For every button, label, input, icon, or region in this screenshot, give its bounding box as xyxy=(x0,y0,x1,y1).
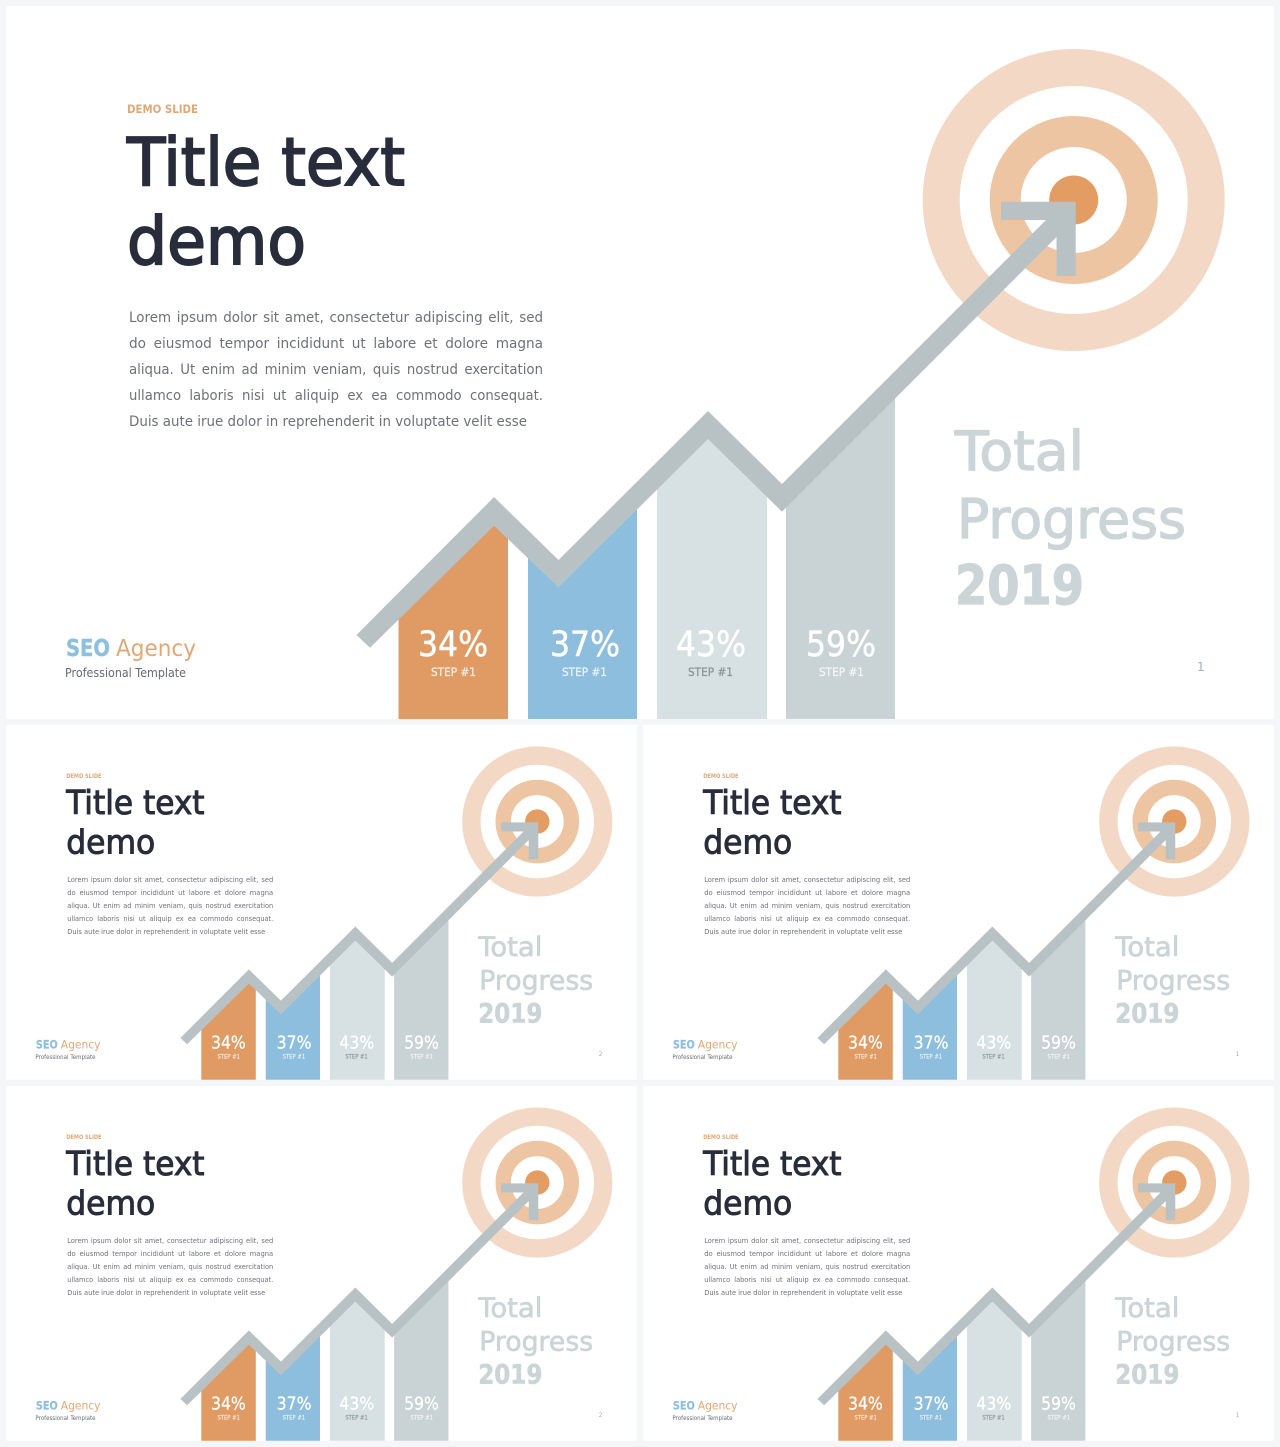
heading: total progress: Progress xyxy=(1116,1327,1230,1358)
bar labels: STEP #1 xyxy=(819,665,864,679)
body text: ullamco laboris nisi ut aliquip ex ea commodo consequat. xyxy=(704,1275,910,1284)
body text: ullamco laboris nisi ut aliquip ex ea commodo consequat. xyxy=(129,388,543,404)
bar labels: STEP #1 xyxy=(283,1415,305,1421)
bar labels: STEP #1 xyxy=(217,1415,240,1421)
bar chart: four steps xyxy=(201,1275,448,1441)
heading: total progress: Progress xyxy=(957,488,1186,551)
bar labels xyxy=(848,1033,1076,1060)
bar labels: STEP #1 xyxy=(982,1054,1005,1060)
logo: SEO xyxy=(36,1398,58,1412)
title xyxy=(126,124,405,280)
bar labels: STEP #1 xyxy=(283,1054,305,1060)
bar labels: 43% xyxy=(976,1033,1011,1053)
body text: aliqua. Ut enim ad minim veniam, quis nostrud exercitation xyxy=(129,362,543,378)
body text: ullamco laboris nisi ut aliquip ex ea commodo consequat. xyxy=(67,1275,273,1284)
body text: ullamco laboris nisi ut aliquip ex ea commodo consequat. xyxy=(67,914,273,923)
icon: target xyxy=(941,68,1206,332)
bar labels: 37% xyxy=(914,1033,949,1053)
heading: total progress: 2019 xyxy=(478,1360,542,1391)
logo: Professional Template xyxy=(672,1054,733,1061)
panel: main slide xyxy=(6,6,1274,719)
bar labels xyxy=(418,625,876,679)
eyebrow label: DEMO SLIDE xyxy=(66,1135,102,1141)
body text: Lorem ipsum dolor sit amet, consectetur adipiscing elit, sed xyxy=(704,875,910,884)
bar labels: STEP #1 xyxy=(854,1054,877,1060)
bar labels xyxy=(848,1394,1076,1421)
body text: Lorem ipsum dolor sit amet, consectetur adipiscing elit, sed xyxy=(704,1236,910,1245)
heading: total progress: Total xyxy=(477,1293,542,1324)
heading: total progress: Total xyxy=(1114,932,1179,963)
logo: Agency xyxy=(698,1037,738,1051)
icon: target xyxy=(1108,1117,1240,1248)
logo: Agency xyxy=(61,1398,101,1412)
body text: Duis aute irue dolor in reprehenderit in voluptate velit esse xyxy=(67,927,266,936)
body text: do eiusmod tempor incididunt ut labore et dolore magna xyxy=(67,888,273,897)
bar labels: 37% xyxy=(277,1033,312,1053)
body text: Lorem ipsum dolor sit amet, consectetur adipiscing elit, sed xyxy=(129,310,543,326)
body text: Lorem ipsum dolor sit amet, consectetur adipiscing elit, sed xyxy=(67,1236,273,1245)
title: Title text xyxy=(702,784,842,822)
logo: SEO xyxy=(36,1037,58,1051)
eyebrow label: DEMO SLIDE xyxy=(127,102,198,116)
bar labels: 34% xyxy=(418,625,488,665)
arrow: rising zigzag to target xyxy=(817,1183,1175,1405)
logo: SEO xyxy=(673,1037,695,1051)
panel: slide thumbnail top left xyxy=(6,725,637,1080)
logo: Agency xyxy=(116,636,196,662)
title: demo xyxy=(66,1184,155,1222)
heading: total progress: Total xyxy=(477,932,542,963)
bar labels: 43% xyxy=(339,1394,374,1414)
body text: Lorem ipsum dolor sit amet, consectetur adipiscing elit, sed xyxy=(67,875,273,884)
bar labels: 34% xyxy=(211,1394,246,1414)
title: demo xyxy=(703,823,792,861)
body text: ullamco laboris nisi ut aliquip ex ea commodo consequat. xyxy=(704,914,910,923)
page number: 2 xyxy=(599,1051,603,1058)
heading: total progress xyxy=(954,420,1186,617)
bar labels xyxy=(211,1394,439,1421)
panel: slide thumbnail top right xyxy=(643,725,1274,1080)
title: demo xyxy=(703,1184,792,1222)
title: Title text xyxy=(126,124,405,201)
heading: total progress: 2019 xyxy=(1115,1360,1179,1391)
title xyxy=(65,784,205,861)
body text: Duis aute irue dolor in reprehenderit in voluptate velit esse xyxy=(67,1288,266,1297)
title: Title text xyxy=(65,784,205,822)
body text: aliqua. Ut enim ad minim veniam, quis nostrud exercitation xyxy=(704,1262,910,1271)
arrow: rising zigzag to target xyxy=(180,822,538,1044)
page number: 1 xyxy=(1236,1051,1240,1058)
arrow: rising zigzag to target xyxy=(180,1183,538,1405)
body text xyxy=(704,875,910,936)
heading: total progress: Progress xyxy=(479,1327,593,1358)
body text xyxy=(704,1236,910,1297)
body text: Duis aute irue dolor in reprehenderit in voluptate velit esse xyxy=(704,927,903,936)
bar labels: 43% xyxy=(976,1394,1011,1414)
bar labels: STEP #1 xyxy=(920,1415,942,1421)
heading: total progress xyxy=(1114,932,1230,1030)
bar chart: four steps xyxy=(838,1275,1085,1441)
title: Title text xyxy=(65,1145,205,1183)
heading: total progress: 2019 xyxy=(1115,999,1179,1030)
logo xyxy=(672,1398,738,1422)
bar labels: 43% xyxy=(676,625,746,665)
bar labels: 59% xyxy=(404,1394,439,1414)
title xyxy=(702,1145,842,1222)
logo: Professional Template xyxy=(672,1415,733,1422)
bar chart: four steps xyxy=(838,914,1085,1080)
title xyxy=(65,1145,205,1222)
page number: 1 xyxy=(1236,1412,1240,1419)
bar labels: 34% xyxy=(211,1033,246,1053)
bar labels: 37% xyxy=(914,1394,949,1414)
bar labels: STEP #1 xyxy=(411,1054,433,1060)
bar labels: 59% xyxy=(806,625,876,665)
panel: slide thumbnail bottom right xyxy=(643,1086,1274,1441)
bar labels: 59% xyxy=(404,1033,439,1053)
heading: total progress xyxy=(1114,1293,1230,1391)
logo xyxy=(35,1398,101,1422)
heading: total progress: Total xyxy=(1114,1293,1179,1324)
title: demo xyxy=(66,823,155,861)
page number: 2 xyxy=(599,1412,603,1419)
body text: aliqua. Ut enim ad minim veniam, quis nostrud exercitation xyxy=(67,901,273,910)
body text: do eiusmod tempor incididunt ut labore et dolore magna xyxy=(129,336,543,352)
bar labels: 34% xyxy=(848,1033,883,1053)
body text: aliqua. Ut enim ad minim veniam, quis nostrud exercitation xyxy=(704,901,910,910)
bar labels: STEP #1 xyxy=(345,1054,368,1060)
heading: total progress xyxy=(477,932,593,1030)
bar labels: 59% xyxy=(1041,1394,1076,1414)
bar labels: STEP #1 xyxy=(562,665,607,679)
logo xyxy=(65,636,196,680)
logo: Agency xyxy=(698,1398,738,1412)
bar labels: STEP #1 xyxy=(688,665,733,679)
title: demo xyxy=(127,203,306,280)
bar labels: STEP #1 xyxy=(411,1415,433,1421)
panel: slide thumbnail bottom left xyxy=(6,1086,637,1441)
body text: do eiusmod tempor incididunt ut labore et dolore magna xyxy=(704,1249,910,1258)
bar labels: 59% xyxy=(1041,1033,1076,1053)
eyebrow label: DEMO SLIDE xyxy=(66,774,102,780)
logo: SEO xyxy=(673,1398,695,1412)
logo: SEO xyxy=(66,636,110,662)
eyebrow label: DEMO SLIDE xyxy=(703,1135,739,1141)
bar labels: 37% xyxy=(550,625,620,665)
body text: Duis aute irue dolor in reprehenderit in voluptate velit esse xyxy=(129,414,527,430)
eyebrow label: DEMO SLIDE xyxy=(703,774,739,780)
body text: do eiusmod tempor incididunt ut labore et dolore magna xyxy=(704,888,910,897)
bar labels: STEP #1 xyxy=(1048,1054,1070,1060)
logo: Agency xyxy=(61,1037,101,1051)
heading: total progress: 2019 xyxy=(955,554,1084,617)
icon: target xyxy=(471,1117,603,1248)
heading: total progress: Total xyxy=(954,420,1084,483)
icon: target xyxy=(1108,756,1240,887)
logo: Professional Template xyxy=(35,1054,96,1061)
body text: aliqua. Ut enim ad minim veniam, quis nostrud exercitation xyxy=(67,1262,273,1271)
body text: Duis aute irue dolor in reprehenderit in voluptate velit esse xyxy=(704,1288,903,1297)
bar chart: four steps xyxy=(398,385,895,719)
heading: total progress: Progress xyxy=(479,966,593,997)
bar labels: STEP #1 xyxy=(920,1054,942,1060)
bar labels xyxy=(211,1033,439,1060)
bar labels: 43% xyxy=(339,1033,374,1053)
bar labels: STEP #1 xyxy=(217,1054,240,1060)
title xyxy=(702,784,842,861)
heading: total progress: Progress xyxy=(1116,966,1230,997)
logo xyxy=(672,1037,738,1061)
body text: do eiusmod tempor incididunt ut labore et dolore magna xyxy=(67,1249,273,1258)
heading: total progress: 2019 xyxy=(478,999,542,1030)
icon: target xyxy=(471,756,603,887)
bar labels: STEP #1 xyxy=(431,665,476,679)
arrow: rising zigzag to target xyxy=(356,202,1076,648)
heading: total progress xyxy=(477,1293,593,1391)
logo: Professional Template xyxy=(35,1415,96,1422)
bar labels: 37% xyxy=(277,1394,312,1414)
bar labels: STEP #1 xyxy=(345,1415,368,1421)
bar labels: STEP #1 xyxy=(1048,1415,1070,1421)
bar chart: four steps xyxy=(201,914,448,1080)
body text xyxy=(67,875,273,936)
logo: Professional Template xyxy=(65,665,186,680)
arrow: rising zigzag to target xyxy=(817,822,1175,1044)
body text xyxy=(67,1236,273,1297)
body text xyxy=(129,310,543,430)
logo xyxy=(35,1037,101,1061)
title: Title text xyxy=(702,1145,842,1183)
bar labels: STEP #1 xyxy=(982,1415,1005,1421)
bar labels: 34% xyxy=(848,1394,883,1414)
bar labels: STEP #1 xyxy=(854,1415,877,1421)
page number: 1 xyxy=(1197,660,1205,674)
